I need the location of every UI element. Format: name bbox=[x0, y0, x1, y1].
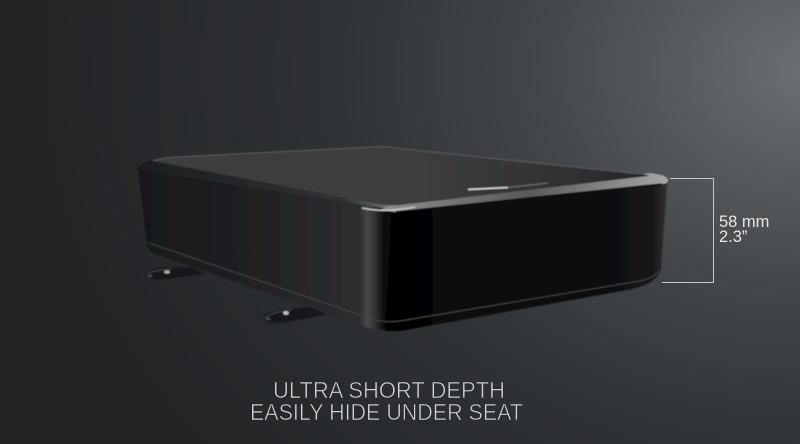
dimension label: 2.3” bbox=[719, 228, 747, 246]
caption: EASILY HIDE UNDER SEAT bbox=[250, 399, 523, 425]
top grille edge highlight bbox=[153, 147, 640, 174]
right face bbox=[385, 178, 667, 331]
lip: left top rim bbox=[138, 160, 395, 211]
caption bbox=[250, 377, 523, 425]
dimension label: 58 mm bbox=[719, 213, 769, 231]
lip: right top rim bbox=[382, 173, 668, 212]
corner highlight bbox=[362, 207, 415, 210]
top speaker grille bbox=[153, 147, 648, 205]
caption: ULTRA SHORT DEPTH bbox=[273, 377, 505, 403]
product: speaker enclosure bbox=[138, 147, 668, 331]
logo on grille bbox=[468, 188, 508, 190]
bottom seam lines bbox=[149, 243, 659, 322]
product: mounting feet bbox=[146, 267, 326, 323]
left face bbox=[138, 167, 394, 331]
dimension bracket bbox=[662, 178, 714, 282]
